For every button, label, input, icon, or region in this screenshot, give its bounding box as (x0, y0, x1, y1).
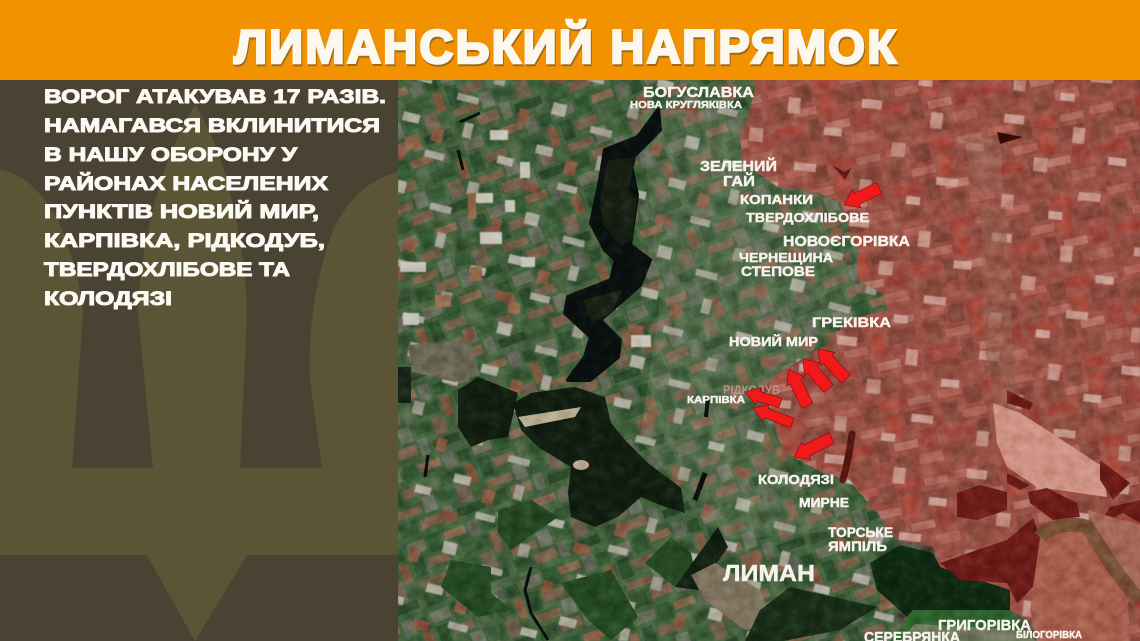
label: Bohuslavka: БОГУСЛАВКА (643, 85, 755, 101)
map: sand clearing (518, 407, 581, 427)
text block: summary: НАМАГАВСЯ ВКЛИНИТИСЯ (44, 115, 380, 137)
map: pond in red zone (832, 165, 852, 180)
arrow: Karpivka attack (750, 400, 795, 431)
arrow: Novyi Myr attack 1 (811, 342, 853, 386)
map: woods south of Lyman (745, 587, 877, 641)
map: pale and rust field patches (398, 80, 898, 641)
arrow: Ridkodub attack (742, 383, 783, 412)
map: dark pond (997, 132, 1023, 144)
label: Zelenyi: ЗЕЛЕНИЙ (700, 157, 777, 175)
text block: summary: В НАШУ ОБОРОНУ У (44, 144, 298, 166)
map: dark woods by Lyman (675, 527, 728, 590)
emblem: trident watermark (0, 105, 398, 641)
label: Chernechchyna: ЧЕРНЕЩИНА (739, 250, 834, 265)
map: dark red forests (940, 390, 1140, 603)
text block: summary: РАЙОНАХ НАСЕЛЕНИХ (44, 171, 328, 195)
map: red occupied zone (740, 80, 1140, 641)
map: lower river island (583, 290, 622, 322)
label: Ridkodub: РІДКОДУБ (723, 383, 780, 397)
label: Hai: ГАЙ (723, 172, 755, 190)
title: ЛИМАНСЬКИЙ НАПРЯМОК (234, 20, 896, 73)
map: forest west (398, 367, 411, 403)
arrow: Kolodiazi attack (789, 429, 836, 466)
label: Stepove: СТЕПОВЕ (741, 263, 815, 279)
label: Kopanky: КОПАНКИ (740, 192, 813, 207)
label: Karpivka: КАРПІВКА (687, 394, 745, 406)
label: Hryhorivka: ГРИГОРІВКА (938, 617, 1031, 634)
map: corridor in red zone (980, 207, 1016, 417)
map: light land south (900, 624, 1035, 641)
map: pale area south-east (993, 403, 1107, 497)
map: green woods (441, 500, 695, 640)
map: pale fields in red zone (740, 80, 1140, 641)
map: town in red zone (963, 137, 1003, 190)
map: green base terrain (398, 80, 898, 641)
label: Kolodiazi: КОЛОДЯЗІ (758, 472, 834, 487)
map: olive river valley (1040, 525, 1140, 600)
label: Lyman: ЛИМАН (723, 560, 815, 586)
map: lighter fields near the front (640, 110, 860, 540)
arrow: Tverdokhlibove attack (840, 179, 883, 214)
map: streams (425, 113, 708, 640)
text block: summary: КАРПІВКА, РІДКОДУБ, (44, 230, 325, 252)
label: Nova Kruhliakivka: НОВА КРУГЛЯКІВКА (630, 100, 742, 111)
map: river (565, 110, 660, 380)
arrow: Novyi Myr attack 3 (780, 365, 816, 410)
text block: summary: КОЛОДЯЗІ (44, 288, 172, 310)
map: south-east land east (1087, 510, 1140, 590)
text block: summary: ТВЕРДОХЛІБОВЕ ТА (44, 259, 290, 281)
label: Yampil: ЯМПІЛЬ (828, 538, 887, 554)
left panel background (0, 80, 398, 641)
map: sand around Lyman (691, 563, 766, 630)
panel: satellite map (398, 80, 1140, 641)
map: small sand clearing (573, 460, 589, 470)
text block: summary: ПУНКТІВ НОВИЙ МИР, (44, 199, 319, 223)
map: grain texture (398, 80, 1140, 641)
title bar (0, 0, 1140, 80)
map: forest south (870, 545, 1010, 617)
label: Bilohorivka: БІЛОГОРІВКА (1016, 630, 1082, 641)
text block: summary: ВОРОГ АТАКУВАВ 17 РАЗІВ. (44, 86, 386, 108)
map: inner south-east land (1030, 530, 1130, 641)
map: dark strip by the front (843, 434, 852, 480)
map: forest 1 (458, 377, 518, 447)
label: Novoiehorivka: НОВОЄГОРІВКА (783, 234, 911, 250)
label: Myrne: МИРНЕ (799, 495, 849, 510)
map: hand-placed pale fields (400, 130, 651, 347)
arrow: Novyi Myr attack 2 (795, 352, 836, 395)
label: Hrekivka: ГРЕКІВКА (812, 314, 891, 330)
text block: summary (44, 86, 386, 310)
map: forest 2 (513, 387, 685, 527)
map: bright green forest edge (890, 610, 1033, 641)
label: Tverdokhlibove: ТВЕРДОХЛІБОВЕ (746, 210, 869, 225)
map: town in the west (408, 340, 480, 382)
label: Novyi Myr: НОВИЙ МИР (729, 334, 818, 349)
label: Torske: ТОРСЬКЕ (828, 524, 893, 540)
map: river islands (600, 158, 637, 246)
